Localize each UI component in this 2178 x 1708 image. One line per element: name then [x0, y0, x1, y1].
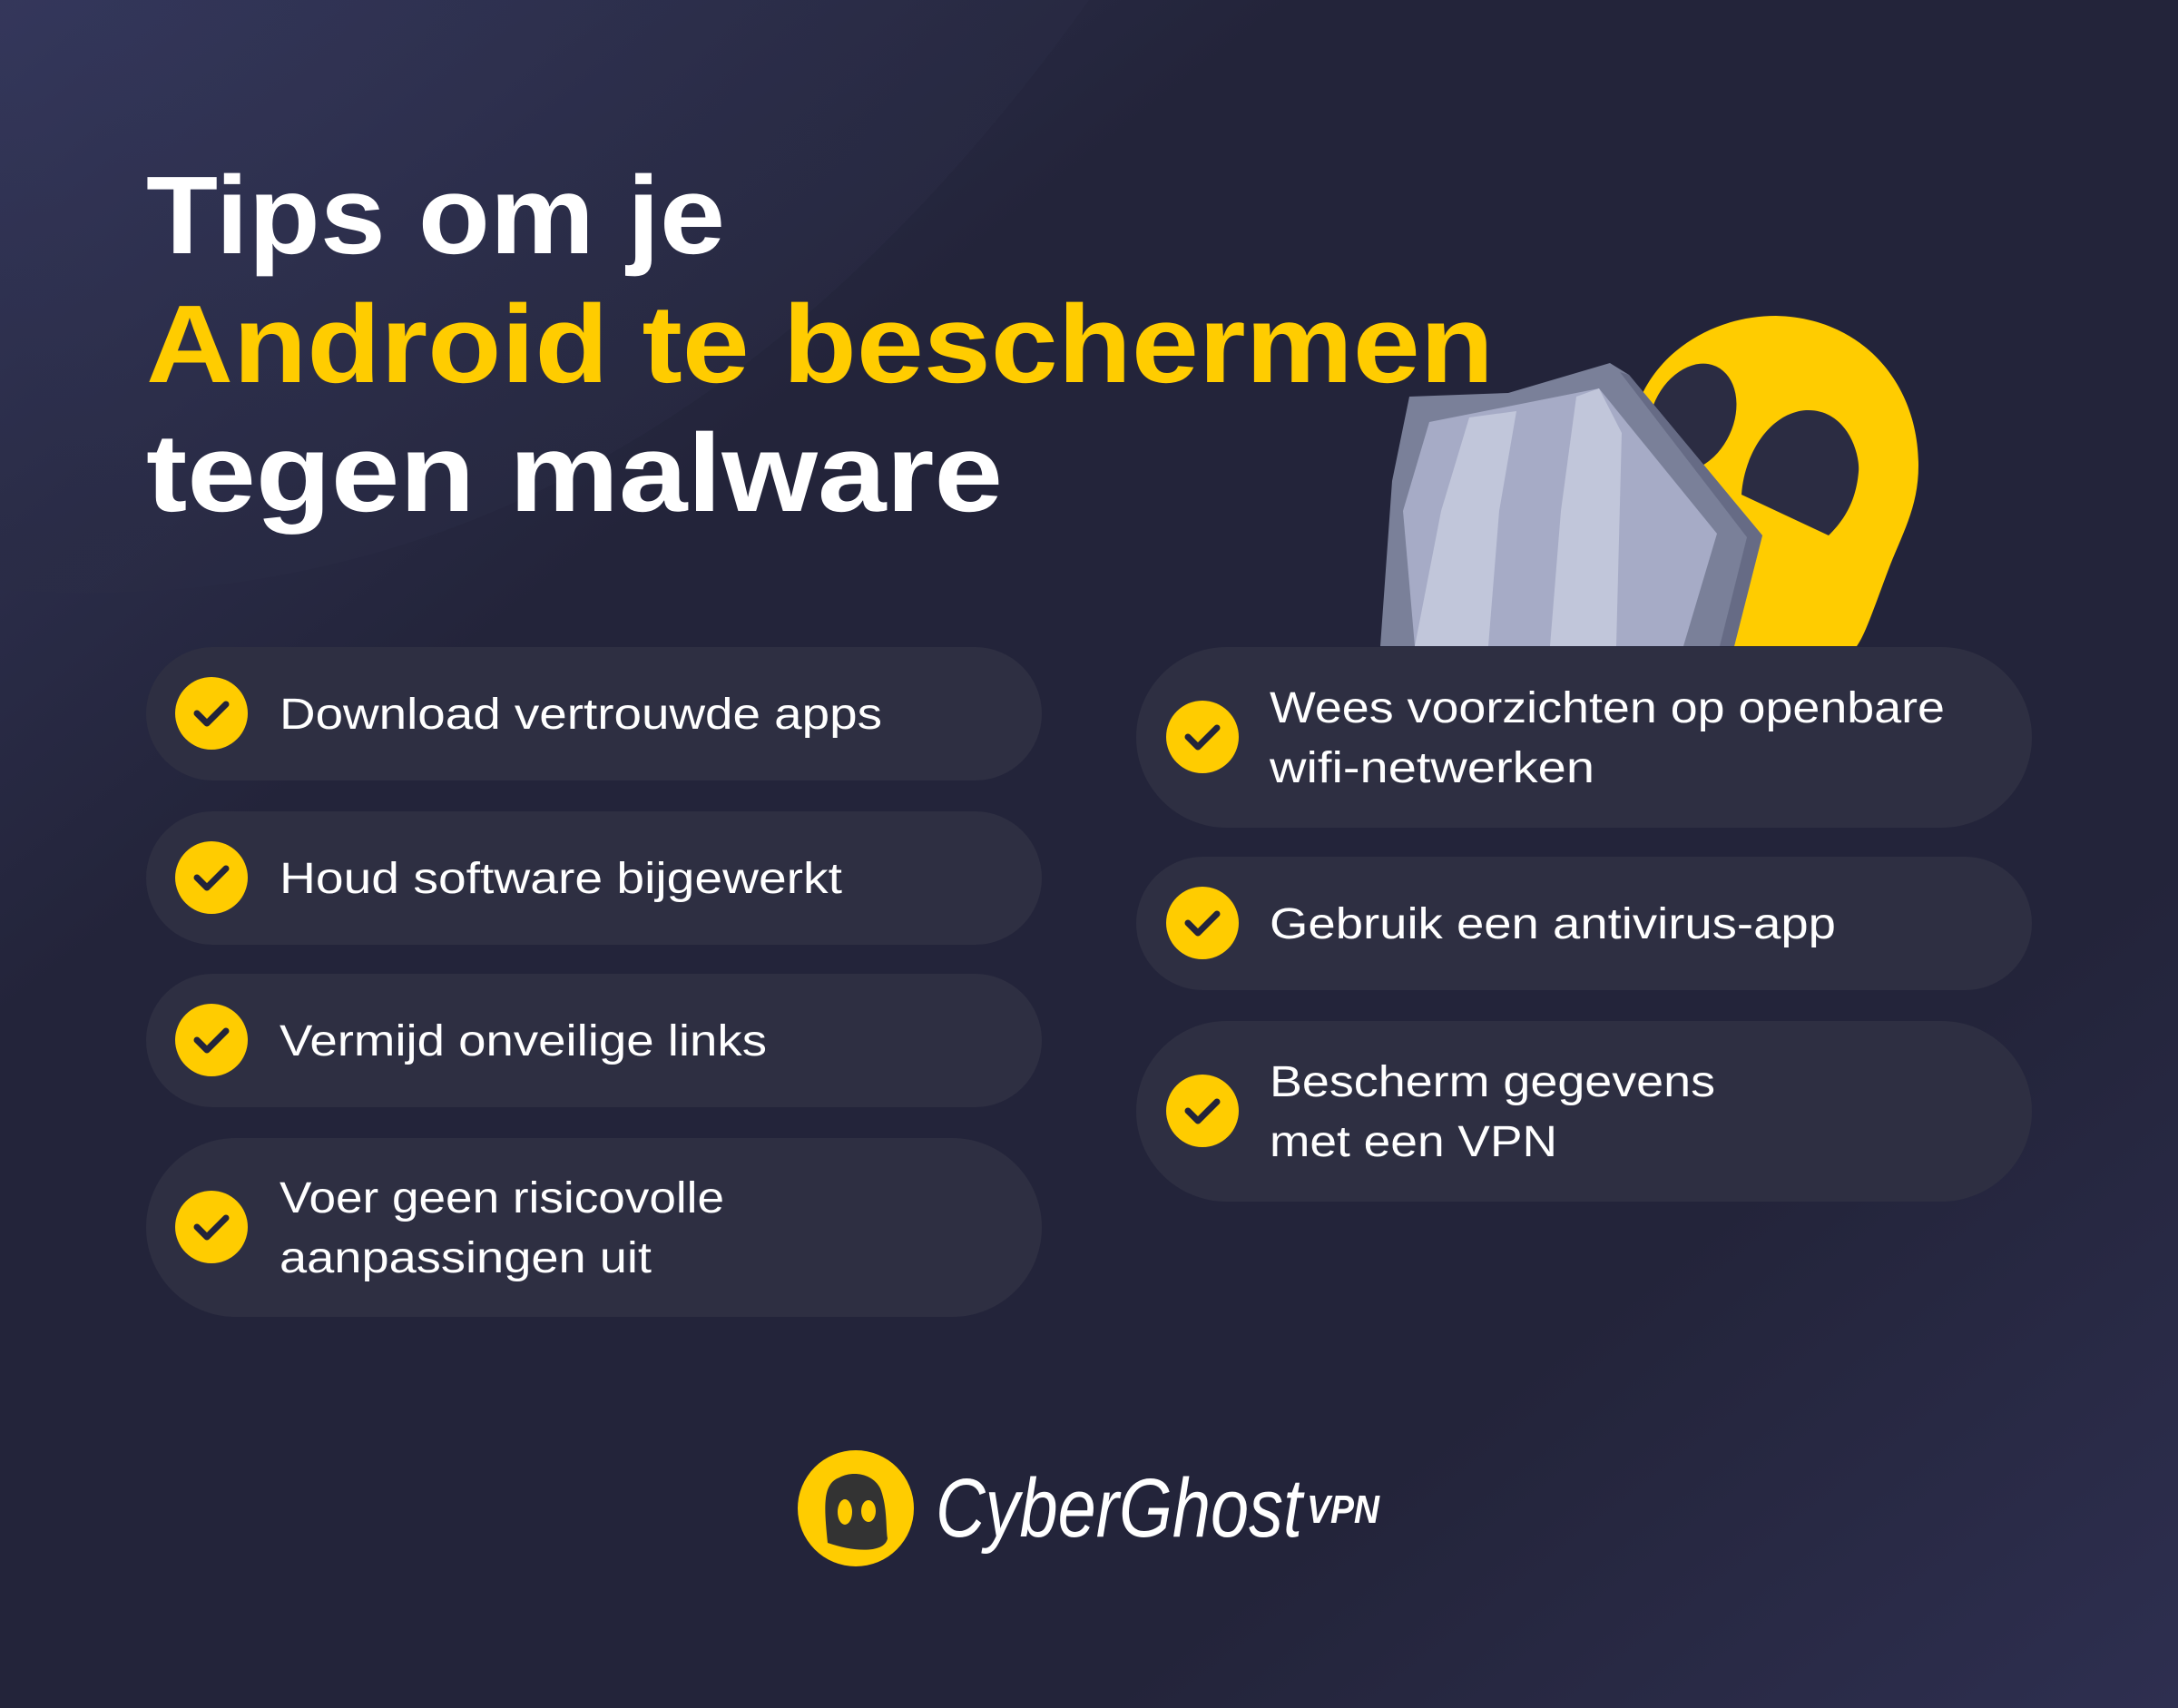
check icons: [175, 677, 1239, 1263]
tip texts: met een VPN: [1270, 1118, 1557, 1166]
tip texts: wifi-netwerken: [1269, 744, 1594, 792]
tip texts: Download vertrouwde apps: [280, 691, 882, 739]
tip texts: Vermijd onveilige links: [280, 1017, 767, 1065]
tip texts: Bescherm gegevens: [1270, 1058, 1715, 1106]
title: tegen malware: [146, 411, 1003, 535]
tip texts: Houd software bijgewerkt: [280, 855, 842, 903]
tip texts: Gebruik een antivirus-app: [1270, 900, 1836, 948]
tip texts: [280, 684, 1945, 1282]
right pills: [1136, 647, 2032, 1202]
tip texts: Voer geen risicovolle: [280, 1174, 724, 1222]
logo: VPN: [1307, 1487, 1380, 1532]
tip texts: Wees voorzichten op openbare: [1270, 684, 1945, 732]
left pills: [146, 647, 1042, 1317]
logo: CyberGhost: [936, 1462, 1305, 1555]
title: Android te beschermen: [146, 282, 1494, 406]
tip texts: aanpassingen uit: [280, 1234, 652, 1282]
logo: [798, 1450, 1380, 1566]
illustration: ghost with shield: [1380, 316, 1918, 646]
title: Tips om je: [146, 153, 725, 277]
title: [146, 153, 1494, 535]
